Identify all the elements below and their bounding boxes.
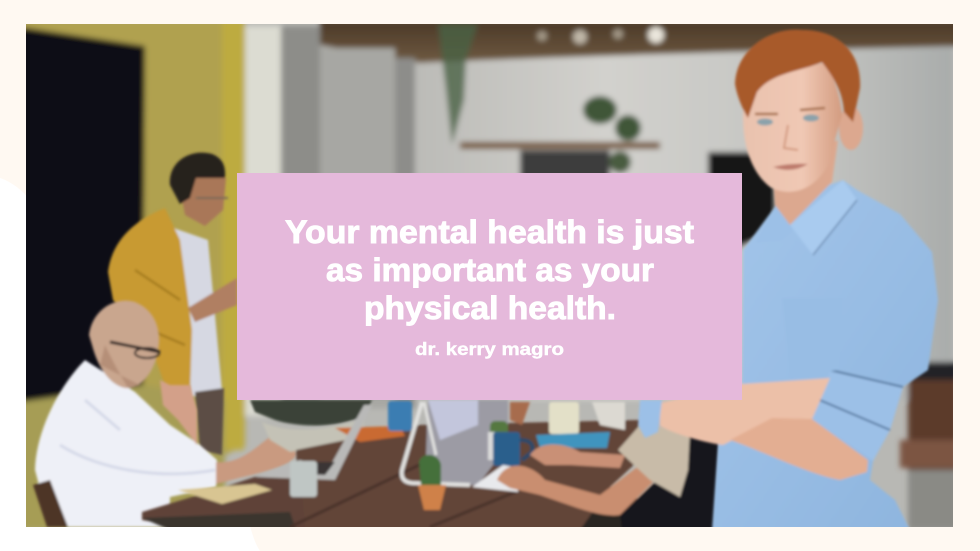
face — [743, 62, 842, 192]
forearms — [660, 378, 830, 445]
attribution: dr. kerry magro — [415, 339, 564, 359]
quote text: Your mental health is just — [285, 214, 694, 250]
table and desk items — [142, 400, 720, 530]
quote panel — [237, 173, 742, 400]
neck — [772, 140, 838, 225]
rolled sleeve — [862, 388, 900, 458]
hair — [735, 30, 860, 122]
quote text — [285, 214, 694, 326]
eyes and mouth — [757, 118, 773, 126]
man with crossed arms — [638, 30, 938, 530]
pocket — [829, 368, 836, 372]
standing man — [108, 153, 237, 455]
seated man — [33, 301, 296, 527]
quote text: as important as your — [326, 252, 654, 288]
collar — [755, 204, 800, 243]
shirt — [700, 180, 938, 530]
quote text: physical health. — [364, 290, 616, 326]
ear — [839, 106, 863, 150]
